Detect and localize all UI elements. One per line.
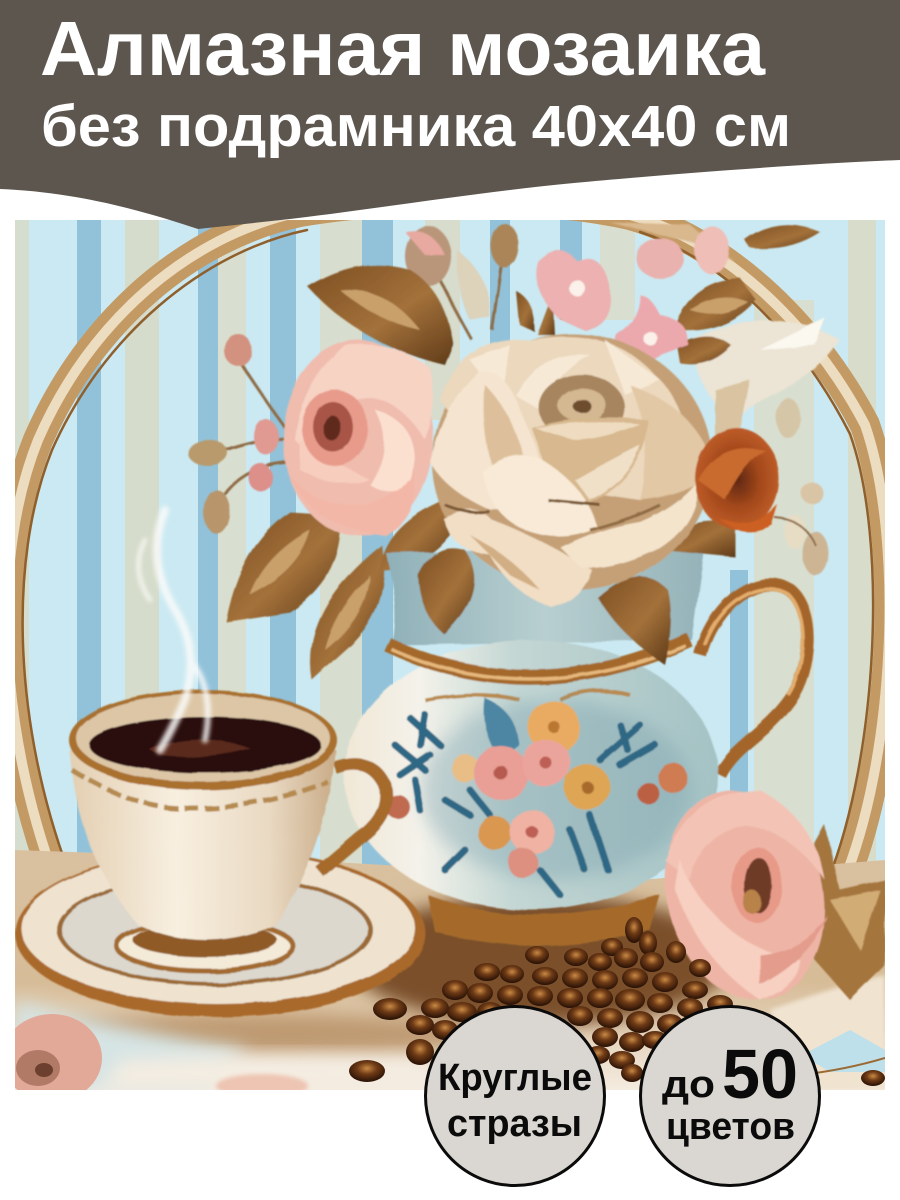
badge: up to 50 colours (640, 1006, 820, 1186)
leaves right of table rose (800, 825, 885, 1000)
bouquet leaves behind flowers (226, 225, 820, 680)
subtitle: без подрамника 40х40 см (41, 94, 791, 159)
leaf highlights (250, 290, 748, 650)
small pink blossoms (536, 222, 735, 367)
steam (139, 510, 208, 750)
leaves in front of vase (418, 521, 735, 665)
pink rose on table (664, 790, 828, 1000)
coffee cup (69, 690, 386, 940)
table surface (15, 850, 885, 1098)
painting: coffee cup, vase and roses (2, 200, 889, 1102)
vase with floral pattern (344, 545, 808, 946)
badge: up to 50 colours: цветов (666, 1106, 795, 1148)
badge: up to 50 colours: 50 (722, 1035, 798, 1113)
header banner (0, 0, 900, 229)
saucer (15, 849, 425, 1017)
badge: up to 50 colours: до (662, 1064, 715, 1106)
coffee beans (349, 917, 885, 1086)
vase floral decoration (386, 698, 690, 895)
badge: round rhinestones: Круглые (438, 1057, 592, 1099)
buds and twigs (188, 224, 519, 534)
badge: round rhinestones: стразы (447, 1103, 582, 1145)
title: Алмазная мозаика (40, 6, 766, 92)
striped wallpaper background (15, 220, 885, 880)
painted subject group (15, 222, 885, 1017)
bottom left rose (15, 1014, 102, 1090)
pink rose (283, 340, 433, 536)
badge: round rhinestones (426, 1006, 604, 1186)
pale foliage behind bouquet (457, 250, 840, 575)
cream peony (430, 334, 714, 608)
rust rose (695, 428, 779, 531)
gold round frame (7, 200, 889, 885)
